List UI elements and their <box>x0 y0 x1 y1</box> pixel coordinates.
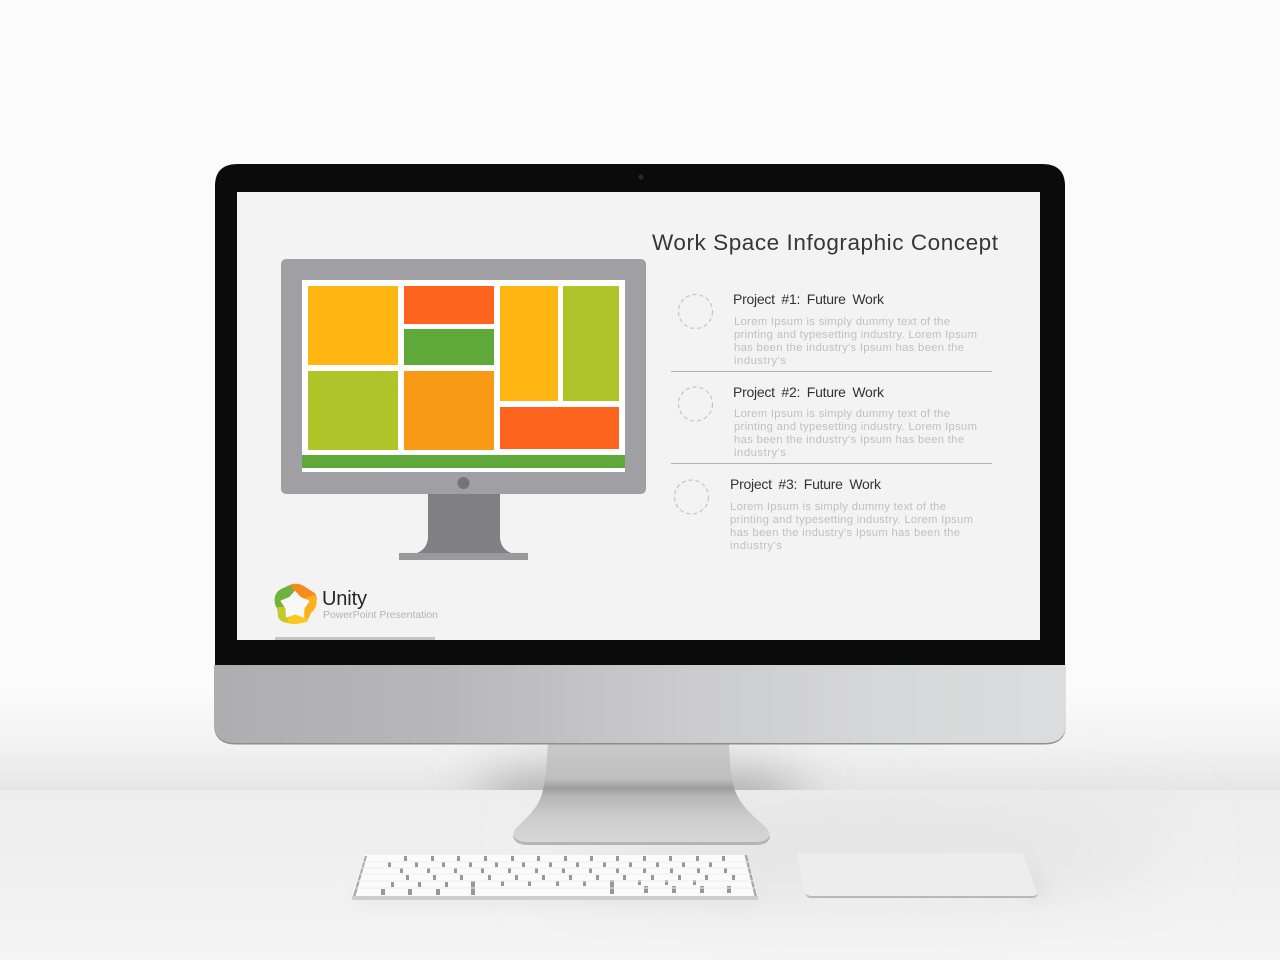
heading 2: Project #2: Future Work <box>733 384 885 400</box>
body 3: printing and typesetting industry. Lorem Ipsum <box>730 514 973 526</box>
body 2 <box>734 408 977 459</box>
keyboard shadow <box>360 893 762 901</box>
trackpad edge <box>805 893 1037 898</box>
chin <box>214 665 1066 744</box>
dashed circle icon 3 <box>674 480 708 514</box>
key gaps <box>381 856 735 895</box>
background table <box>0 790 1280 960</box>
logo icon <box>276 585 316 623</box>
body 2: printing and typesetting industry. Lorem Ipsum <box>734 421 977 433</box>
trackpad shadow <box>1020 858 1048 895</box>
title: Work Space Infographic Concept <box>652 230 999 255</box>
key rows <box>355 862 755 888</box>
keyboard edges <box>353 855 757 896</box>
body 1 <box>734 316 977 367</box>
illustration screen <box>302 280 625 472</box>
body 3: Lorem Ipsum is simply dummy text of the <box>730 501 946 513</box>
webcam <box>638 174 644 180</box>
bezel <box>215 164 1065 665</box>
body 2: Lorem Ipsum is simply dummy text of the <box>734 408 950 420</box>
dashed circle icon 2 <box>678 387 712 421</box>
logo wordmark: Unity <box>322 588 367 610</box>
trackpad <box>797 853 1048 898</box>
item: project 3 <box>674 476 973 552</box>
logo: Unity <box>276 585 438 623</box>
keyboard <box>352 855 762 901</box>
illustration power button <box>458 477 470 489</box>
monitor body <box>214 164 1066 744</box>
illustration stand <box>399 494 528 560</box>
logo star <box>281 592 309 617</box>
logo tagline: PowerPoint Presentation <box>323 609 438 621</box>
body 2: industry's <box>734 447 786 459</box>
illustration: monitor with tiles <box>281 259 646 560</box>
illustration frame <box>281 259 646 494</box>
dashed circle icon 1 <box>678 294 712 328</box>
body 2: has been the industry's Ipsum has been the <box>734 434 964 446</box>
body 1: printing and typesetting industry. Lorem Ipsum <box>734 329 977 341</box>
item: project 2 <box>678 384 977 459</box>
screen slide <box>237 192 1040 640</box>
body 1: has been the industry's Ipsum has been the <box>734 342 964 354</box>
scene: desktop computer mockup <box>0 164 1280 920</box>
monitor stand <box>513 744 770 845</box>
keyboard body <box>352 855 758 899</box>
body 1: Lorem Ipsum is simply dummy text of the <box>734 316 950 328</box>
body 3: industry's <box>730 540 782 552</box>
heading 3: Project #3: Future Work <box>730 476 882 492</box>
body 1: industry's <box>734 355 786 367</box>
body 3: has been the industry's Ipsum has been the <box>730 527 960 539</box>
tiles <box>302 286 625 468</box>
body 3 <box>730 501 973 552</box>
heading 1: Project #1: Future Work <box>733 291 885 307</box>
item: project 1 <box>678 291 977 367</box>
trackpad surface <box>797 853 1037 896</box>
